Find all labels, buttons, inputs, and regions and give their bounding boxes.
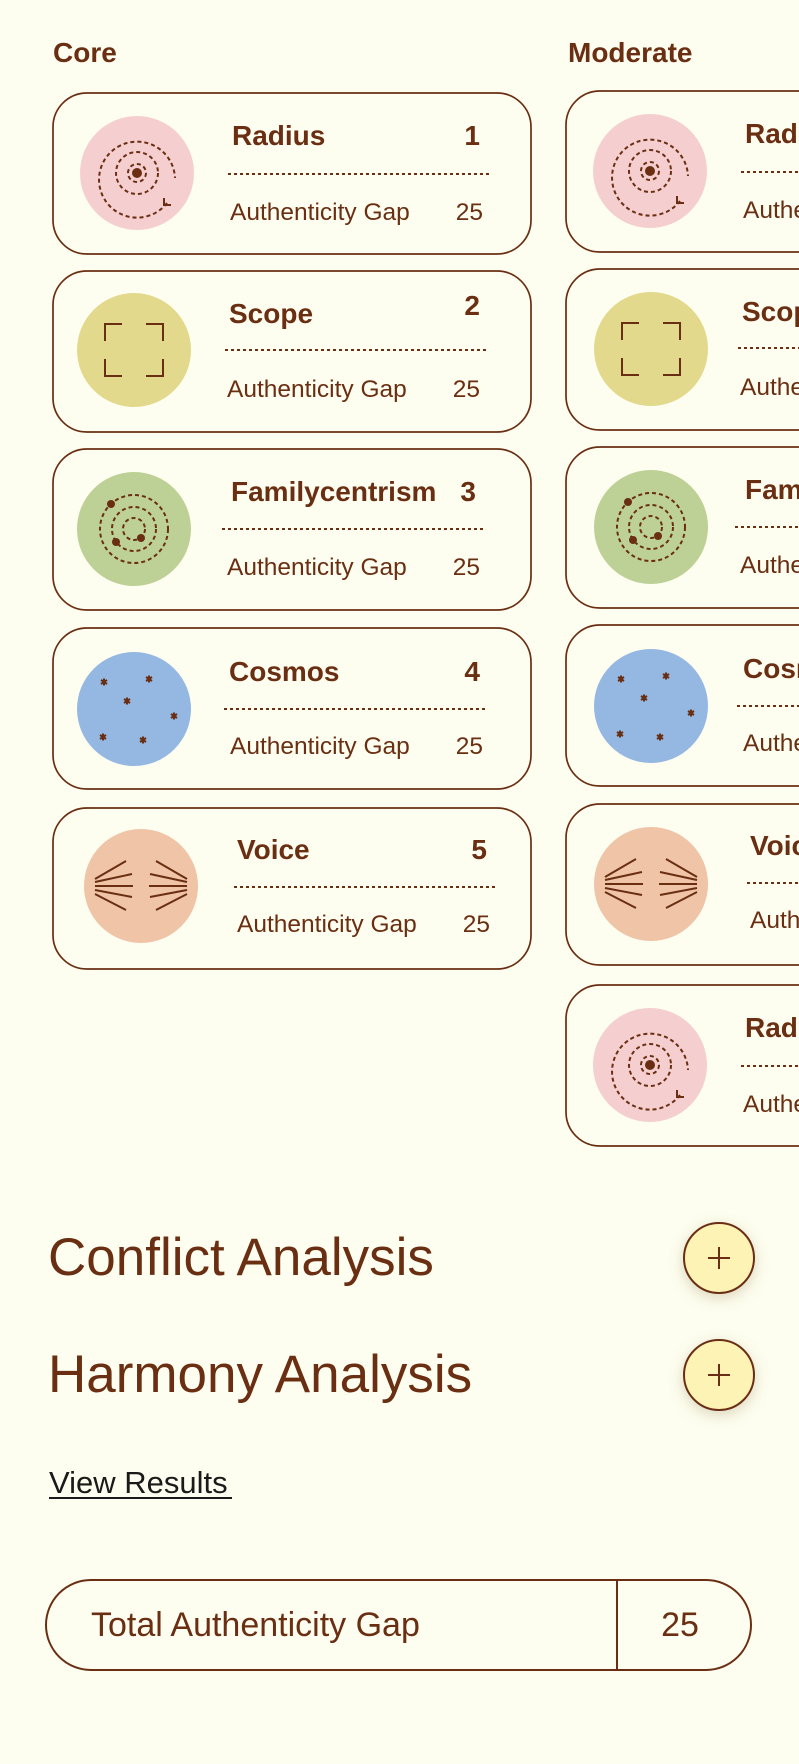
card: Core Radius: 1: [464, 120, 480, 151]
card: Core Voice: 5: [471, 834, 487, 865]
icon: voice lines: [84, 829, 198, 943]
icon: family circles: [77, 472, 191, 586]
card: Moderate Voice: [566, 804, 799, 965]
icon: family circles: [594, 470, 708, 584]
card: Core Familycentrism: Familycentrism: [231, 476, 436, 507]
card: Moderate Radius: [566, 91, 799, 252]
card: Core Voice: [53, 808, 531, 969]
card: Moderate Familycentrism: [566, 447, 799, 608]
heading: Core: Core: [53, 37, 117, 68]
total bar: Total Authenticity Gap: [91, 1606, 420, 1644]
icon: cosmos stars: [77, 652, 191, 766]
card: Core Cosmos: Authenticity Gap: [230, 733, 410, 760]
card: Core Cosmos: [53, 628, 531, 789]
total bar: 25: [661, 1606, 699, 1644]
card: Moderate Cosmos: [566, 625, 799, 786]
icon: scope brackets: [594, 292, 708, 406]
card: Core Familycentrism: 3: [460, 476, 476, 507]
card: Core Familycentrism: [53, 449, 531, 610]
card: Core Cosmos: 25: [456, 733, 483, 760]
icon: scope brackets: [77, 293, 191, 407]
card: Core Cosmos: Cosmos: [229, 656, 339, 687]
heading: Conflict Analysis: Conflict Analysis: [48, 1228, 434, 1287]
card: Core Scope: [53, 271, 531, 432]
card: Core Voice: Authenticity Gap: [237, 911, 417, 938]
card: Core Voice: 25: [463, 911, 490, 938]
card: Moderate Radius 2: [566, 985, 799, 1146]
card: Core Scope: 2: [464, 290, 480, 321]
heading: Harmony Analysis: Harmony Analysis: [48, 1345, 472, 1404]
card: Core Radius: 25: [456, 199, 483, 226]
total bar: [46, 1580, 751, 1670]
card: Core Scope: 25: [453, 376, 480, 403]
card: Core Scope: Authenticity Gap: [227, 376, 407, 403]
button: harmony expand: [684, 1340, 754, 1410]
card: Core Voice: Voice: [237, 834, 310, 865]
card: Core Radius: Authenticity Gap: [230, 199, 410, 226]
icon: radius spiral: [593, 1008, 707, 1122]
card: Core Radius: Radius: [232, 120, 325, 151]
icon: radius spiral: [80, 116, 194, 230]
link: View Results: View Results: [49, 1465, 228, 1500]
icon: cosmos stars: [594, 649, 708, 763]
card: Moderate Scope: [566, 269, 799, 430]
card: Core Cosmos: 4: [464, 656, 480, 687]
card: Core Familycentrism: Authenticity Gap: [227, 554, 407, 581]
button: conflict expand: [684, 1223, 754, 1293]
heading: Moderate: Moderate: [568, 37, 692, 68]
icon: radius spiral: [593, 114, 707, 228]
card: Core Familycentrism: 25: [453, 554, 480, 581]
icon: voice lines: [594, 827, 708, 941]
card: Core Scope: Scope: [229, 298, 313, 329]
card: Core Radius: [53, 93, 531, 254]
